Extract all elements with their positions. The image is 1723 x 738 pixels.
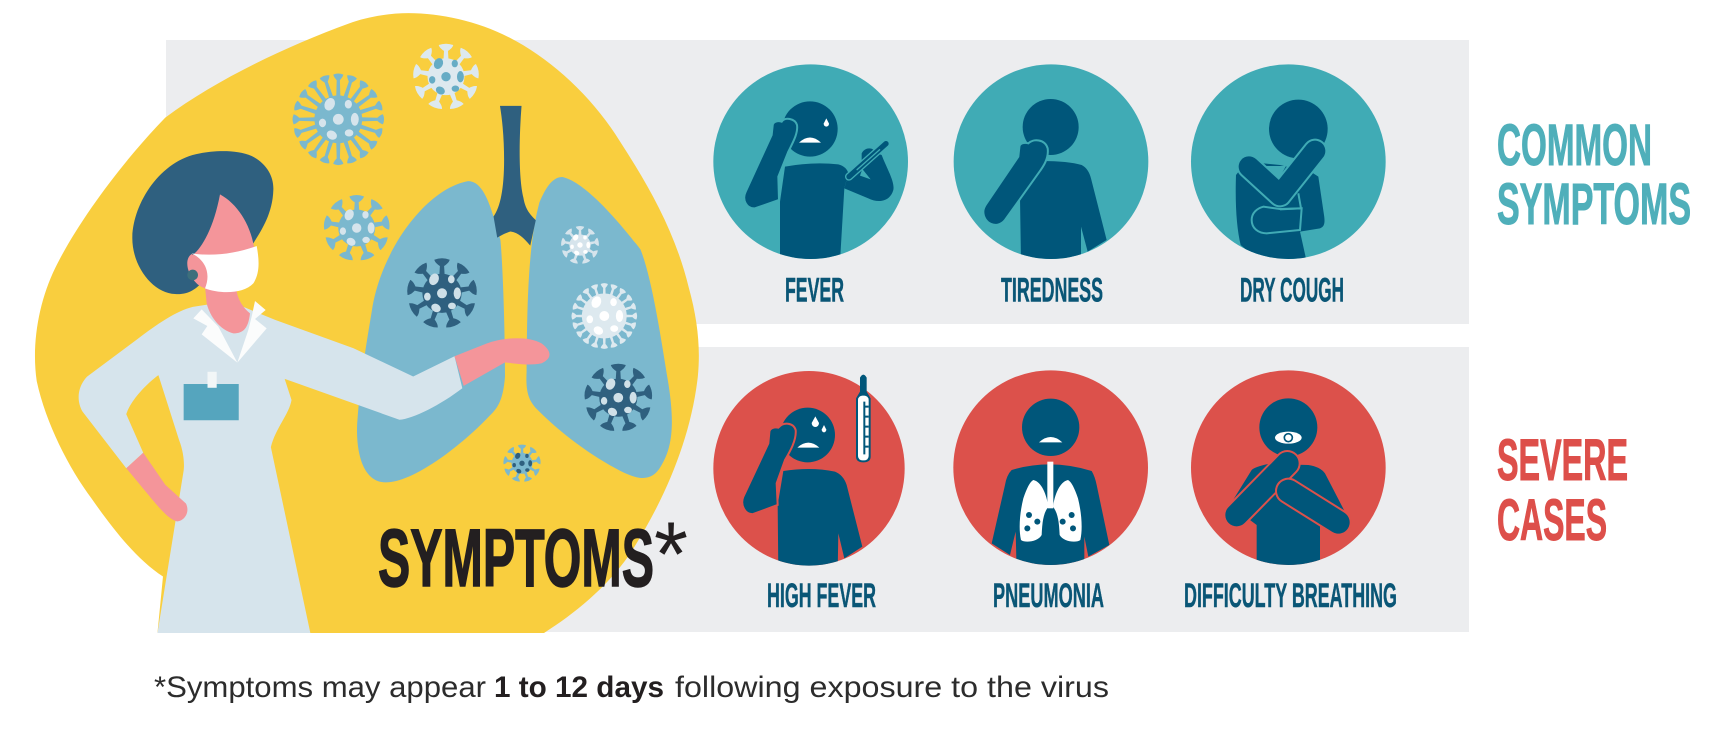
virus 2: [412, 44, 480, 110]
neck: [205, 287, 250, 333]
yellow blob with lungs: [35, 13, 699, 633]
label: high fever: HIGH FEVER: [767, 577, 876, 615]
virus 7: [584, 364, 653, 432]
heading: severe cases: [1497, 428, 1628, 553]
icon: tiredness: [954, 64, 1148, 262]
virus 4: [406, 258, 478, 329]
panel: severe cases background: [166, 347, 1469, 632]
face: [190, 194, 257, 292]
left lung: [357, 181, 505, 482]
virus 1: [293, 74, 384, 165]
label: tiredness: TIREDNESS: [1001, 272, 1103, 310]
pneumonia lungs: [1020, 462, 1082, 542]
face mask: [192, 246, 259, 292]
footnote: following exposure to the virus: [675, 671, 1109, 704]
icon: dry cough: [1191, 64, 1386, 262]
ear: [187, 254, 210, 288]
badge clip: [208, 372, 217, 388]
hair: [132, 151, 273, 294]
icon: fever: [713, 64, 908, 262]
main heading: *: [654, 504, 688, 606]
hand on hip: [126, 453, 187, 521]
trachea: [494, 106, 536, 246]
right lung: [526, 177, 672, 478]
coat: [79, 301, 462, 633]
main heading: [378, 504, 688, 606]
doctor body: [79, 301, 550, 633]
footnote: 1 to 12 days: [494, 671, 664, 704]
icon: pneumonia: [953, 370, 1148, 572]
panel: common symptoms background: [166, 40, 1469, 324]
heading: severe cases: CASES: [1497, 488, 1607, 553]
footnote: [154, 671, 1109, 704]
yellow blob: [35, 13, 699, 633]
main heading: SYMPTOMS: [378, 513, 654, 604]
virus 8: [503, 445, 541, 482]
doctor head: [132, 151, 273, 363]
collar: [193, 301, 267, 363]
virus 5: [561, 226, 599, 264]
footnote: *Symptoms may appear: [154, 671, 486, 704]
label: fever: FEVER: [785, 272, 844, 310]
virus 6: [571, 283, 637, 349]
pointing hand: [455, 338, 550, 386]
icon: high fever: [713, 371, 905, 572]
heading: common symptoms: [1497, 113, 1691, 237]
virus 3: [323, 195, 390, 261]
label: difficulty breathing: DIFFICULTY BREATHING: [1184, 577, 1397, 615]
thermometer: [856, 375, 871, 462]
label: dry cough: DRY COUGH: [1240, 272, 1344, 310]
name badge: [184, 384, 239, 420]
earring: [187, 270, 198, 280]
icon: difficulty breathing: [1191, 370, 1386, 572]
label: pneumonia: PNEUMONIA: [993, 577, 1104, 615]
